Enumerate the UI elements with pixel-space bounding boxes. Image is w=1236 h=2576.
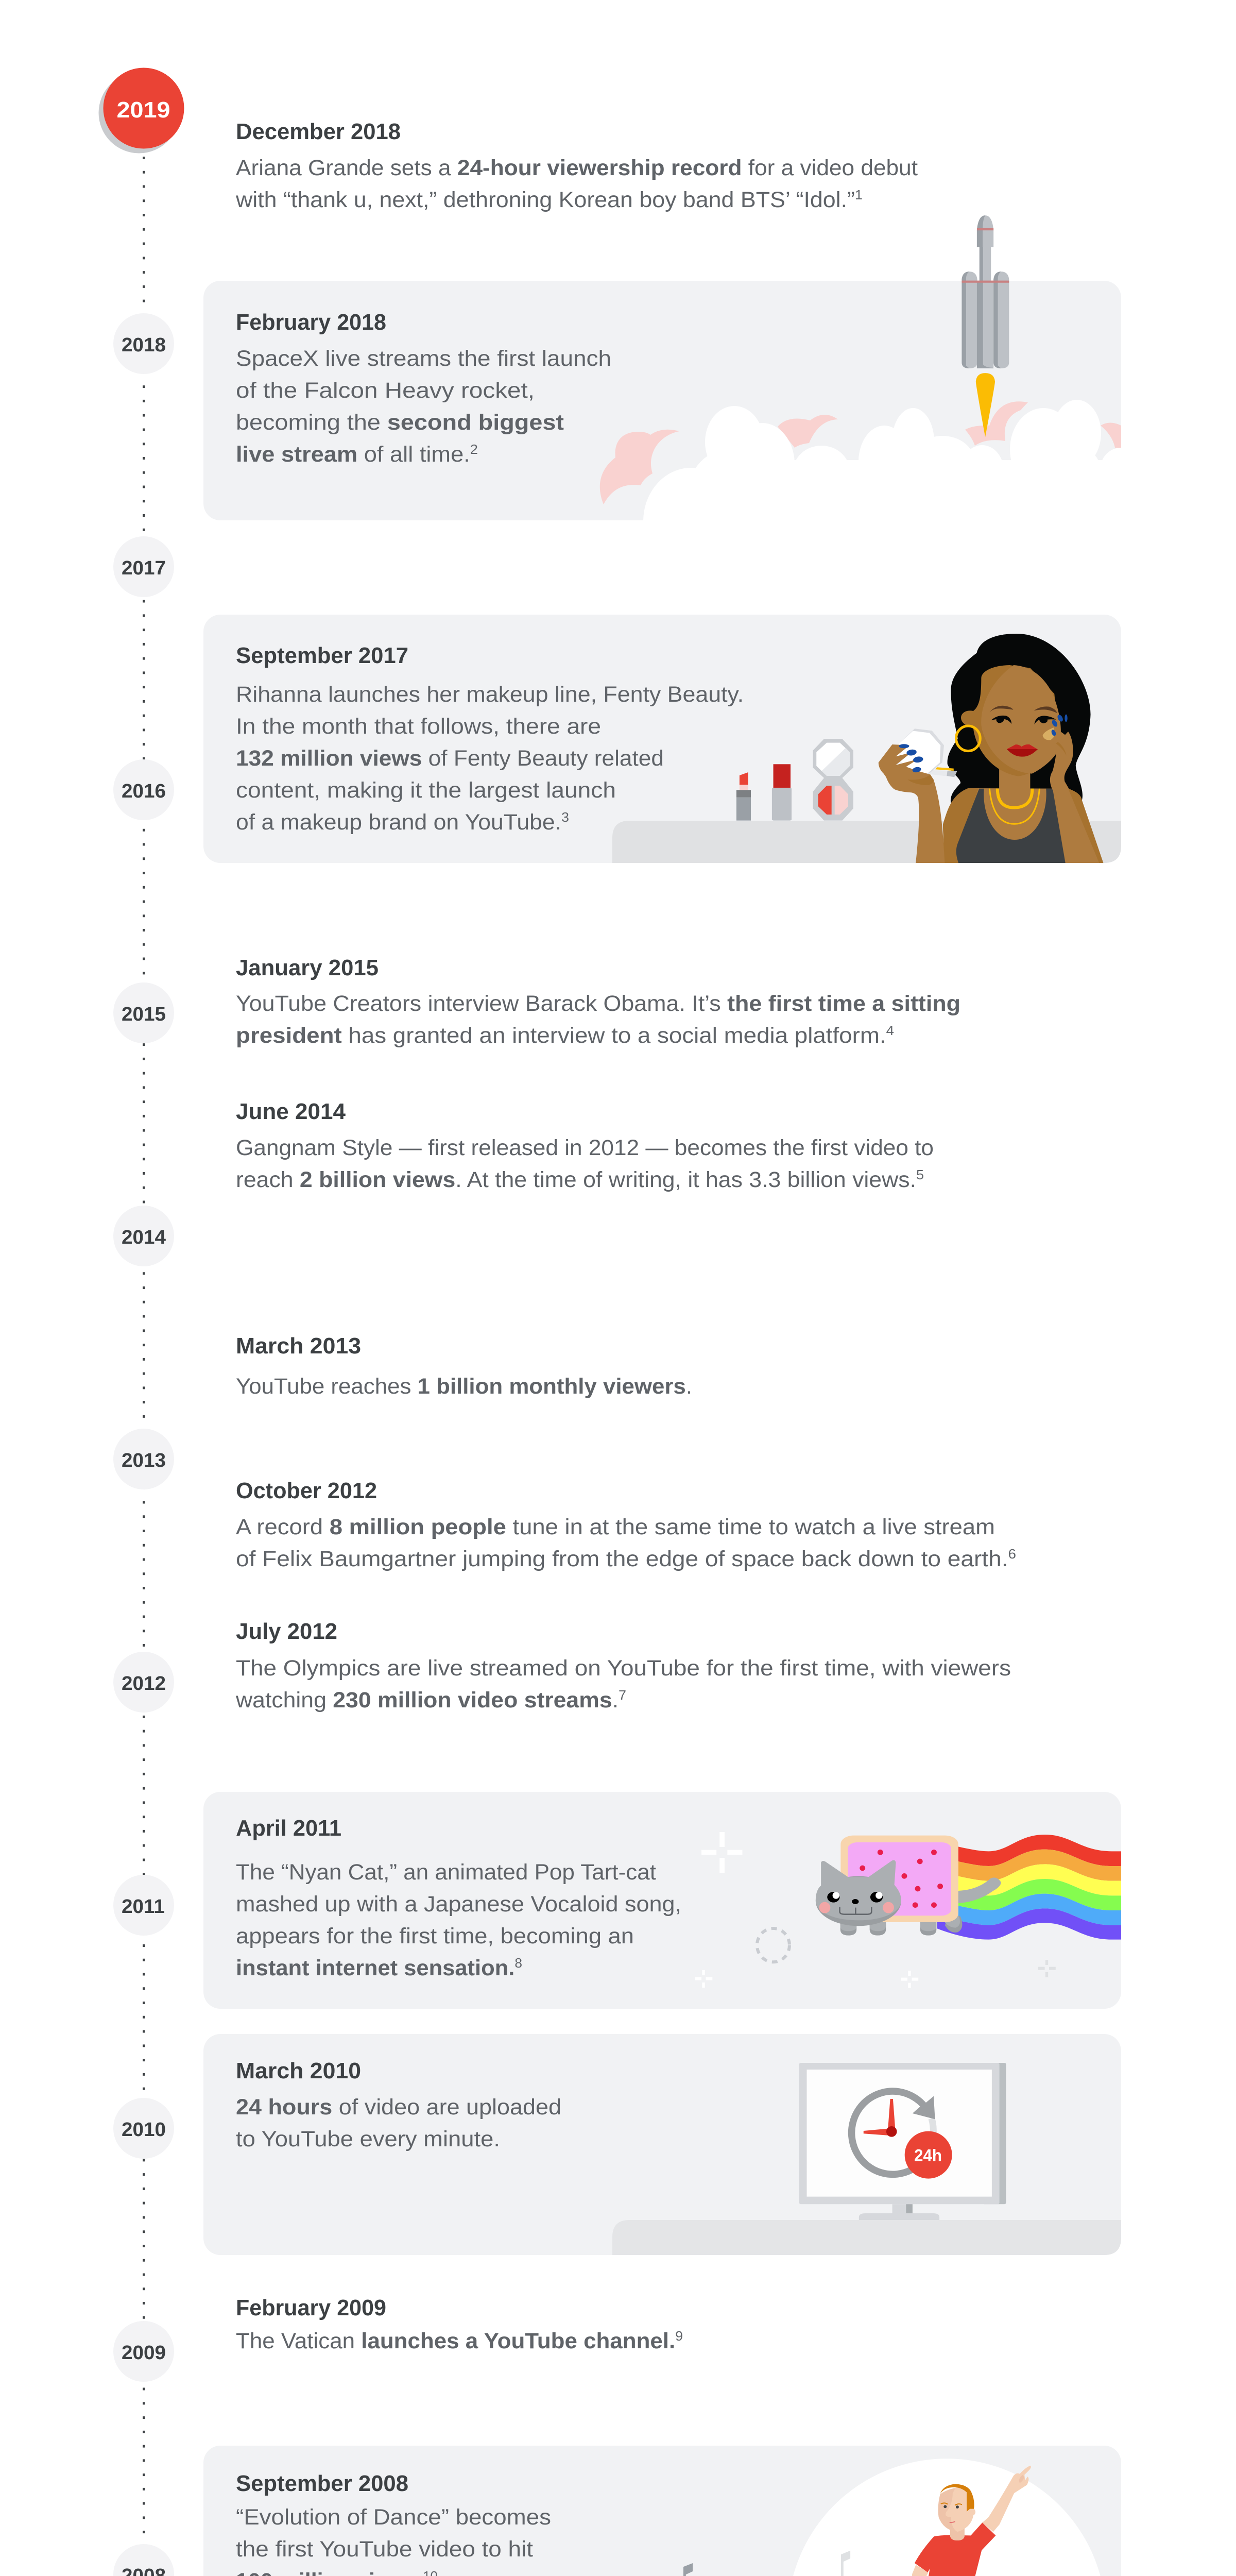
text: Fenty Beauty: In the month that follows, there are xyxy=(236,714,601,739)
year marker 2008 xyxy=(113,2544,174,2576)
panel background xyxy=(203,2446,1121,2576)
text: Vatican channel: 9 xyxy=(675,2328,683,2344)
text: Nyan Cat: The “Nyan Cat,” an animated Pop Tart-cat xyxy=(236,1860,656,1885)
year marker 2010: 2010 xyxy=(122,2119,166,2141)
text: SpaceX live stream: 2 xyxy=(470,442,478,457)
heading: March 2013: March 2013 xyxy=(236,1333,361,1359)
text: Evolution of Dance xyxy=(236,2505,551,2576)
heading: February 2018: February 2018 xyxy=(236,310,386,335)
text: Ariana Grande record: with “thank u, next,” dethroning Korean boy band BTS’ “Idol.” xyxy=(236,188,831,212)
text: SpaceX live stream: live stream of all time. xyxy=(236,442,465,467)
text: SpaceX live stream xyxy=(236,346,611,467)
year marker 2014: 2014 xyxy=(122,1227,166,1248)
text: Nyan Cat xyxy=(236,1860,681,1980)
entry: March 2013 xyxy=(236,1333,692,1399)
illustration: monitor with clock: 24h xyxy=(914,2146,942,2165)
year marker 2013 xyxy=(113,1429,174,1489)
year marker 2016 xyxy=(113,759,174,820)
year marker 2009 xyxy=(113,2321,174,2382)
illustration: Nyan Cat with rainbow xyxy=(816,1835,1121,1940)
text: Gangnam Style: reach 2 billion views . At the time of writing, it has 3.3 billion views. xyxy=(236,1167,900,1192)
entry: December 2018 xyxy=(235,119,918,212)
year marker 2015 xyxy=(113,982,174,1043)
illustration: Falcon Heavy rocket xyxy=(962,215,1009,437)
panel background xyxy=(203,615,1121,863)
text: 24 hours of video xyxy=(236,2095,561,2151)
year marker 2016: 2016 xyxy=(122,781,166,802)
illustration: music notes xyxy=(674,2551,850,2576)
text: Evolution of Dance: the first YouTube video to hit xyxy=(236,2537,533,2562)
text: Nyan Cat: mashed up with a Japanese Vocaloid song, xyxy=(236,1892,681,1917)
text: 24 hours of video: to YouTube every minute. xyxy=(236,2127,500,2151)
panel background xyxy=(203,281,1121,520)
heading: September 2008: September 2008 xyxy=(236,2471,408,2496)
year marker 2019: 2019 xyxy=(116,97,170,123)
text: Nyan Cat: instant internet sensation. xyxy=(236,1956,514,1980)
text: Felix Baumgartner: 6 xyxy=(1008,1546,1016,1562)
text: 24 hours of video: 24 hours of video are uploaded xyxy=(236,2095,561,2120)
text: Felix Baumgartner: A record 8 million people tune in at the same time to watch a live stream xyxy=(236,1515,995,1539)
text: Fenty Beauty xyxy=(236,682,744,835)
text: Evolution of Dance: “Evolution of Dance” becomes xyxy=(236,2505,551,2530)
text: Nyan Cat: 8 xyxy=(514,1955,522,1971)
timeline dotted line xyxy=(143,157,145,2576)
heading: January 2015: January 2015 xyxy=(236,955,379,980)
panel background xyxy=(203,2034,1121,2255)
year marker 2019 xyxy=(99,68,184,154)
heading: February 2009: February 2009 xyxy=(236,2295,386,2320)
text: Ariana Grande record xyxy=(235,156,918,212)
panel: March 2010 xyxy=(203,2034,1121,2255)
text: 1 billion monthly viewers: YouTube reaches 1 billion monthly viewers. xyxy=(236,1374,692,1399)
text: Nyan Cat: appears for the first time, becoming an xyxy=(236,1924,634,1948)
heading: December 2018: December 2018 xyxy=(236,119,401,144)
year marker 2013: 2013 xyxy=(122,1450,166,1471)
year marker 2009: 2009 xyxy=(122,2342,166,2364)
text: Fenty Beauty: Rihanna launches her makeup line, Fenty Beauty. xyxy=(236,682,744,707)
entry: July 2012 xyxy=(235,1619,1011,1713)
text: Fenty Beauty: content, making it the largest launch xyxy=(236,778,616,803)
text: Olympics live stream: watching 230 million video streams . xyxy=(236,1688,619,1713)
panel background xyxy=(203,1792,1121,2009)
year marker 2018 xyxy=(113,313,174,374)
text: Gangnam Style: 5 xyxy=(916,1167,924,1182)
year marker 2017: 2017 xyxy=(122,557,166,579)
text: Barack Obama interview: YouTube Creators interview Barack Obama. It’s the first time a sitting xyxy=(236,991,960,1016)
year marker 2012: 2012 xyxy=(122,1673,166,1694)
illustration: dancing man xyxy=(907,2466,1031,2576)
text: Ariana Grande record: Ariana Grande sets a 24-hour viewership record for a video debut xyxy=(236,156,918,180)
illustration: sparkles xyxy=(695,1832,1056,1988)
illustration: Rihanna with compact xyxy=(879,634,1103,863)
text: Olympics live stream: The Olympics are live streamed on YouTube for the first time, with viewers xyxy=(236,1656,1011,1681)
illustration: monitor with clock xyxy=(799,2063,1006,2220)
panel: April 2011 xyxy=(203,1792,1121,2009)
floor xyxy=(612,821,1121,863)
text: SpaceX live stream: becoming the second biggest xyxy=(236,410,564,435)
illustration: launch clouds xyxy=(599,400,1121,520)
year marker 2011 xyxy=(113,1875,174,1936)
text: Gangnam Style xyxy=(236,1136,934,1192)
year marker 2012 xyxy=(113,1652,174,1713)
year marker 2014 xyxy=(113,1206,174,1266)
heading: March 2010: March 2010 xyxy=(236,2058,361,2083)
text: Felix Baumgartner xyxy=(236,1515,1016,1571)
year marker 2010 xyxy=(113,2098,174,2159)
illustration: spotlight xyxy=(787,2459,1106,2576)
year marker 2011: 2011 xyxy=(122,1896,165,1918)
year marker 2017 xyxy=(113,536,174,597)
heading: June 2014: June 2014 xyxy=(236,1099,346,1124)
year marker 2015: 2015 xyxy=(122,1004,166,1025)
heading: July 2012: July 2012 xyxy=(236,1619,337,1644)
heading: September 2017: September 2017 xyxy=(236,643,408,668)
floor xyxy=(612,2220,1121,2255)
entry: January 2015 xyxy=(236,955,960,1048)
panel: September 2017 xyxy=(203,615,1121,863)
text: Vatican channel: The Vatican launches a YouTube channel. xyxy=(236,2329,669,2353)
text: Ariana Grande record: 1 xyxy=(855,187,863,202)
entry: February 2009 xyxy=(236,2295,683,2353)
text: Barack Obama interview: 4 xyxy=(886,1023,894,1038)
text: Gangnam Style: Gangnam Style — first released in 2012 — becomes the first video to xyxy=(236,1136,934,1160)
year marker 2018: 2018 xyxy=(122,334,166,356)
entry: October 2012 xyxy=(236,1478,1016,1571)
illustration: makeup products xyxy=(736,739,853,821)
text: SpaceX live stream: of the Falcon Heavy rocket, xyxy=(236,378,535,403)
text: Felix Baumgartner: of Felix Baumgartner jumping from the edge of space back down to earth. xyxy=(236,1547,957,1571)
text: SpaceX live stream: SpaceX live streams the first launch xyxy=(236,346,611,371)
panel: September 2008 xyxy=(203,2446,1121,2576)
text: Fenty Beauty: of a makeup brand on YouTube. xyxy=(236,810,550,835)
text: Olympics live stream: 7 xyxy=(619,1687,626,1703)
text: Olympics live stream xyxy=(235,1656,1011,1713)
text: Barack Obama interview: president has granted an interview to a social media platform. xyxy=(236,1023,854,1048)
text: Fenty Beauty: 3 xyxy=(561,809,569,825)
heading: October 2012: October 2012 xyxy=(236,1478,377,1503)
text: Barack Obama interview xyxy=(236,991,960,1048)
text: Fenty Beauty: 132 million views of Fenty Beauty related xyxy=(236,746,664,771)
panel: February 2018 xyxy=(203,215,1121,520)
heading: April 2011: April 2011 xyxy=(236,1816,341,1841)
entry: June 2014 xyxy=(236,1099,934,1192)
